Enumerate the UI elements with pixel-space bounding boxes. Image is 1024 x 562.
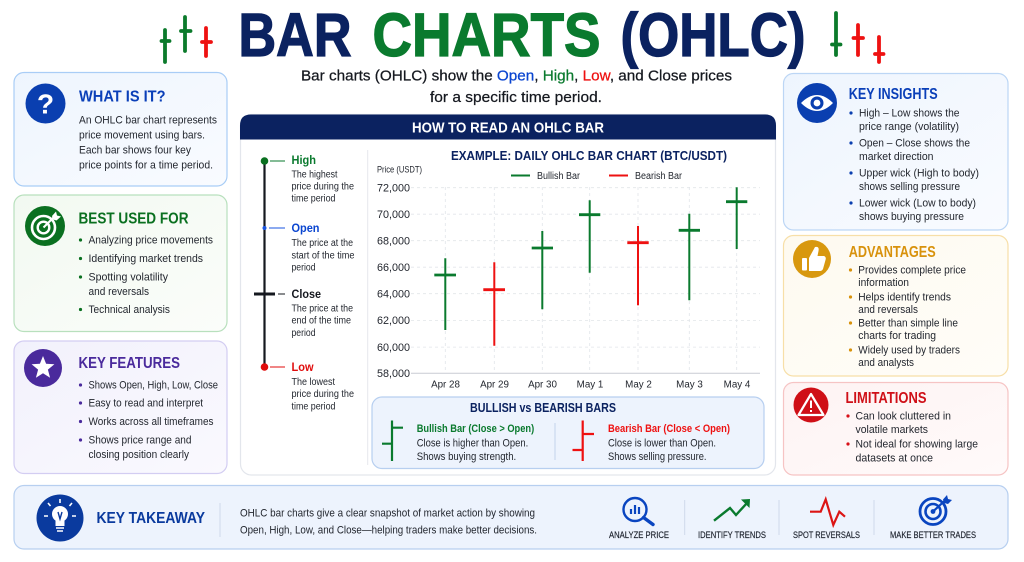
y axis labels: 68,000 [377, 236, 410, 248]
list: advantages: charts for trading [858, 330, 936, 342]
text: what is it body: Each bar shows four key [79, 144, 192, 156]
panel: best used for [14, 195, 227, 332]
text: bearish [608, 423, 730, 463]
list: limitations: volatile markets [856, 424, 929, 436]
icon item: analyze price: ANALYZE PRICE [609, 530, 669, 540]
grid lines [411, 187, 760, 373]
list: advantages: Helps identify trends [858, 292, 952, 304]
icon: bearish bar [572, 420, 594, 461]
icon: thumbs up [793, 240, 831, 278]
list: best used for: Spotting volatility [88, 272, 169, 284]
list: key features: Shows Open, High, Low, Close [88, 380, 218, 392]
list: best used for: Technical analysis [88, 304, 171, 316]
heading: key insights: KEY INSIGHTS [849, 86, 938, 103]
list: advantages [849, 265, 966, 369]
panel: how to read an OHLC bar [240, 114, 776, 475]
list: key insights: Upper wick (High to body) [859, 168, 979, 180]
label: open: The price at the [292, 238, 353, 249]
label: high: High [292, 153, 316, 167]
icon item: spot reversals [793, 499, 860, 540]
y axis labels: 58,000 [377, 368, 410, 380]
text: bullish: Close is higher than Open. [417, 438, 528, 450]
list: key insights: shows selling pressure [859, 181, 960, 193]
text: takeaway: OHLC bar charts give a clear snapshot of market action by showing [240, 508, 535, 520]
label: close: period [292, 328, 316, 339]
list: key features: Shows price range and [88, 435, 192, 447]
subtitle: Bar charts (OHLC) show the Open, High, Low, and Close prices [301, 68, 732, 84]
y axis labels [377, 182, 410, 380]
list: key features: Works across all timeframes [88, 416, 214, 428]
label: low: The lowest [292, 377, 335, 388]
label: low: price during the [292, 389, 355, 400]
legend [511, 171, 683, 182]
y axis labels: 70,000 [377, 209, 410, 221]
label: low [292, 360, 355, 412]
heading: key takeaway: KEY TAKEAWAY [96, 510, 205, 527]
icon item: identify trends: IDENTIFY TRENDS [698, 530, 766, 540]
header bar [240, 114, 776, 140]
heading: advantages: ADVANTAGES [849, 244, 936, 261]
label: high [292, 153, 355, 205]
panel: key insights [784, 74, 1008, 230]
list: key insights: shows buying pressure [859, 211, 964, 223]
text: bullish [417, 423, 535, 463]
y axis labels: 60,000 [377, 342, 410, 354]
panel: what is it [14, 72, 227, 186]
x axis labels: May 4 [724, 380, 751, 390]
panel: limitations [784, 382, 1008, 475]
x axis labels: Apr 29 [480, 380, 509, 390]
icon: warning [794, 388, 828, 422]
list: limitations: datasets at once [856, 453, 933, 465]
list: key insights: Open – Close shows the [859, 138, 970, 150]
heading: bullish vs bearish: BULLISH vs BEARISH BARS [470, 401, 616, 415]
label: open: start of the time [292, 250, 355, 261]
label: close: end of the time [292, 316, 352, 327]
icon item: make better trades [890, 495, 976, 540]
text: takeaway: Open, High, Low, and Close—helping traders make better decisions. [240, 524, 537, 536]
text: bearish: Close is lower than Open. [608, 438, 716, 450]
x axis labels: May 1 [577, 380, 603, 390]
list: key insights: Lower wick (Low to body) [859, 198, 976, 210]
icon: bullish bar [382, 420, 403, 461]
label: open [292, 221, 355, 274]
text: bullish: Bullish Bar (Close > Open) [417, 423, 535, 435]
legend: Bearish Bar [635, 171, 683, 182]
x axis labels: May 3 [676, 380, 703, 390]
list: limitations: Not ideal for showing large [856, 439, 978, 451]
icon: question mark [26, 84, 66, 124]
list: key features: closing position clearly [88, 449, 190, 461]
title [238, 1, 806, 69]
bars [434, 187, 747, 346]
icon: eye [797, 83, 837, 123]
text: bearish: Shows selling pressure. [608, 451, 706, 463]
heading: what is it: WHAT IS IT? [79, 88, 166, 106]
heading: key features: KEY FEATURES [78, 355, 180, 372]
icon: light bulb [36, 494, 84, 542]
list: best used for: and reversals [88, 286, 150, 298]
icon: question mark: ? [37, 88, 54, 120]
label: open: period [292, 262, 316, 274]
label: close: The price at the [292, 304, 353, 314]
label: close [292, 287, 353, 339]
legend: Bullish Bar [537, 171, 581, 182]
icon: right decorative OHLC bars [832, 13, 884, 62]
text: what is it body: price points for a time period. [79, 160, 213, 172]
y axis labels: 64,000 [377, 288, 410, 300]
title: CHARTS [372, 1, 600, 69]
list: best used for: Identifying market trends [88, 253, 204, 265]
axis title: Price (USDT) [377, 164, 422, 174]
header bar: HOW TO READ AN OHLC BAR [412, 120, 604, 136]
text: bearish: Bearish Bar (Close < Open) [608, 423, 730, 435]
y axis labels: 66,000 [377, 262, 410, 274]
list: advantages: Provides complete price [858, 265, 966, 277]
icon: target [25, 206, 65, 246]
x axis labels: Apr 28 [431, 380, 460, 390]
y axis labels: 72,000 [377, 182, 410, 194]
list: advantages: and analysts [858, 357, 915, 369]
label: open: Open [292, 221, 320, 235]
list: limitations [846, 411, 978, 465]
OHLC anatomy diagram [254, 153, 355, 412]
title: BAR [238, 1, 352, 69]
bar chart: daily OHLC [377, 164, 760, 390]
panel: key features [14, 341, 227, 474]
label: low: Low [292, 360, 314, 374]
heading: limitations: LIMITATIONS [846, 390, 927, 407]
panel: advantages [784, 236, 1008, 376]
text: what is it body: An OHLC bar chart represents [79, 114, 218, 126]
panel: key takeaway [14, 486, 1008, 549]
list: key features: Easy to read and interpret [88, 398, 203, 410]
text: bullish: Shows buying strength. [417, 451, 516, 463]
list: limitations: Can look cluttered in [856, 411, 951, 423]
icon item: make better trades: MAKE BETTER TRADES [890, 530, 976, 540]
label: low: time period [292, 401, 336, 412]
subtitle [301, 68, 732, 106]
list: advantages: Better than simple line [858, 318, 958, 330]
panel: bullish vs bearish [372, 397, 764, 468]
list: key insights: High – Low shows the [859, 108, 960, 120]
x axis labels: May 2 [625, 380, 652, 390]
icon item: spot reversals: SPOT REVERSALS [793, 530, 860, 540]
icon item: analyze price [609, 498, 669, 540]
text: what is it body [79, 114, 218, 172]
label: high: price during the [292, 182, 355, 192]
x axis labels: Apr 30 [528, 380, 557, 390]
title: (OHLC) [620, 1, 806, 69]
text: takeaway [240, 508, 537, 536]
list: key insights [849, 108, 979, 223]
label: high: time period [292, 194, 336, 205]
icon: left decorative OHLC bars [162, 17, 211, 62]
label: close: Close [292, 287, 321, 301]
icon item: identify trends [698, 499, 766, 540]
list: key insights: market direction [859, 151, 934, 163]
y axis labels: 62,000 [377, 315, 410, 327]
list: key features [79, 380, 218, 461]
heading: best used for: BEST USED FOR [78, 210, 189, 228]
heading: example chart: EXAMPLE: DAILY OHLC BAR CHART (BTC/USDT) [451, 149, 727, 163]
list: advantages: information [858, 277, 909, 289]
list: advantages: and reversals [858, 304, 919, 316]
list: best used for: Analyzing price movements [88, 235, 214, 247]
icon: star [24, 349, 62, 387]
subtitle: for a specific time period. [430, 89, 602, 106]
list: key insights: price range (volatility) [859, 121, 959, 133]
x axis labels [431, 380, 751, 390]
list: best used for [79, 235, 214, 316]
text: what is it body: price movement using bars. [79, 130, 205, 142]
list: advantages: Widely used by traders [858, 345, 961, 357]
label: high: The highest [292, 169, 338, 180]
